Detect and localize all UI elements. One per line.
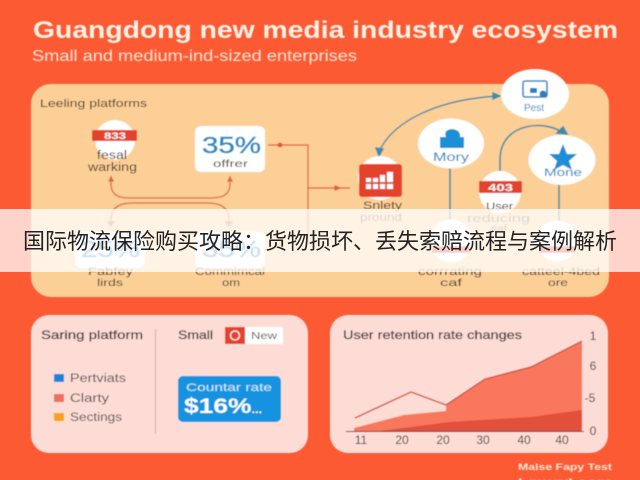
node: catteel-4bed ore: catteel-4bed <box>522 266 600 278</box>
footer note <box>518 462 612 480</box>
x axis labels: 40 <box>555 433 569 447</box>
node: mory <box>418 118 484 245</box>
y axis labels <box>585 329 597 438</box>
heading: small: Small <box>178 328 213 342</box>
panel: leading platforms <box>31 69 609 297</box>
node: corrrating caf: caf <box>440 277 462 289</box>
node: user 403 <box>467 171 530 235</box>
node: building safety: pround <box>360 212 402 224</box>
node: user 403: 403 <box>488 182 513 194</box>
node: fesal warking: 833 <box>104 131 126 142</box>
legend: Clarty <box>70 393 109 405</box>
x axis labels: 40 <box>517 433 531 447</box>
x axis labels: 20 <box>395 433 409 447</box>
node: mone <box>528 135 596 245</box>
banner headline: 国际物流保险购买攻略：货物损坏、丢失索赔流程与案例解析 <box>23 229 617 254</box>
node: corrrating caf: corrrating <box>418 266 482 278</box>
subtitle: Small and medium-ind-sized enterprises <box>32 48 357 65</box>
connector: stat card to building icon <box>268 143 350 245</box>
node: user 403: User <box>486 201 513 213</box>
node: catteel-4bed ore: ore <box>548 277 568 289</box>
callout: counter rate: Countar rate <box>186 382 272 394</box>
stat card: 35% offrer: 35% <box>202 132 261 158</box>
arrow: user to mone <box>500 126 567 172</box>
node: pest: Pest <box>524 103 544 114</box>
stat card: 35% commimcal om: Commimcal <box>195 266 265 278</box>
node: fesal warking: warking <box>87 162 137 174</box>
panel heading: Leeling platforms <box>40 98 148 110</box>
panel: sharing platform <box>31 315 308 453</box>
stat card: 35% commimcal om <box>195 232 265 289</box>
stat card: 35% offrer <box>195 126 265 172</box>
divider heading: saring platform: Saring platform <box>41 328 143 342</box>
badge: new <box>225 327 283 344</box>
chart title: User retention rate changes <box>343 328 522 342</box>
panel: user retention chart <box>330 315 608 453</box>
footer note: Malse Fapy Test <box>518 462 612 472</box>
callout: counter rate: $16% ... <box>184 395 262 418</box>
stat card: 35% commimcal om: om <box>222 277 240 289</box>
y axis labels: -5 <box>585 391 596 405</box>
x axis labels <box>355 433 569 447</box>
area chart <box>346 341 584 432</box>
node: user 403: saf <box>491 224 507 235</box>
node: user 403: reducing <box>467 213 530 225</box>
stat card: 35% offrer: offrer <box>213 158 249 170</box>
x axis labels: 30 <box>476 433 490 447</box>
badge: new: New <box>251 331 278 342</box>
node: fesal warking: fesal <box>97 150 127 162</box>
node: building safety: Snlety <box>363 200 403 212</box>
stat card: 25% fabfey lirds: lirds <box>97 277 123 289</box>
y axis labels: 6 <box>590 359 597 373</box>
node: mone: Mone <box>544 167 582 179</box>
legend: Sectings <box>70 412 122 424</box>
node: catteel-4bed ore <box>522 220 600 289</box>
node: building safety <box>358 156 403 224</box>
callout: counter rate <box>178 376 281 422</box>
stat card: 25% fabfey lirds: 25% <box>81 236 140 262</box>
stat card: 25% fabfey lirds <box>75 232 145 289</box>
y axis labels: 0 <box>590 424 597 438</box>
x axis labels: 20 <box>436 433 450 447</box>
stat card: 35% commimcal om: 35% <box>202 236 261 262</box>
arrow: blue arc between pest and building <box>376 93 500 156</box>
legend <box>54 373 126 424</box>
arrows: curved links up to top nodes <box>108 177 232 226</box>
x axis labels: 11 <box>355 433 368 447</box>
stat card: 25% fabfey lirds: Fabfey <box>88 266 134 278</box>
node: pest <box>501 69 569 119</box>
title: Guangdong new media industry ecosystem <box>33 17 618 44</box>
node: fesal warking <box>87 120 137 174</box>
y axis labels: 1 <box>590 329 597 343</box>
node: corrrating caf <box>418 220 482 289</box>
legend: Pertviats <box>70 373 126 385</box>
banner overlay <box>0 209 640 272</box>
node: mory: Mory <box>433 152 469 164</box>
